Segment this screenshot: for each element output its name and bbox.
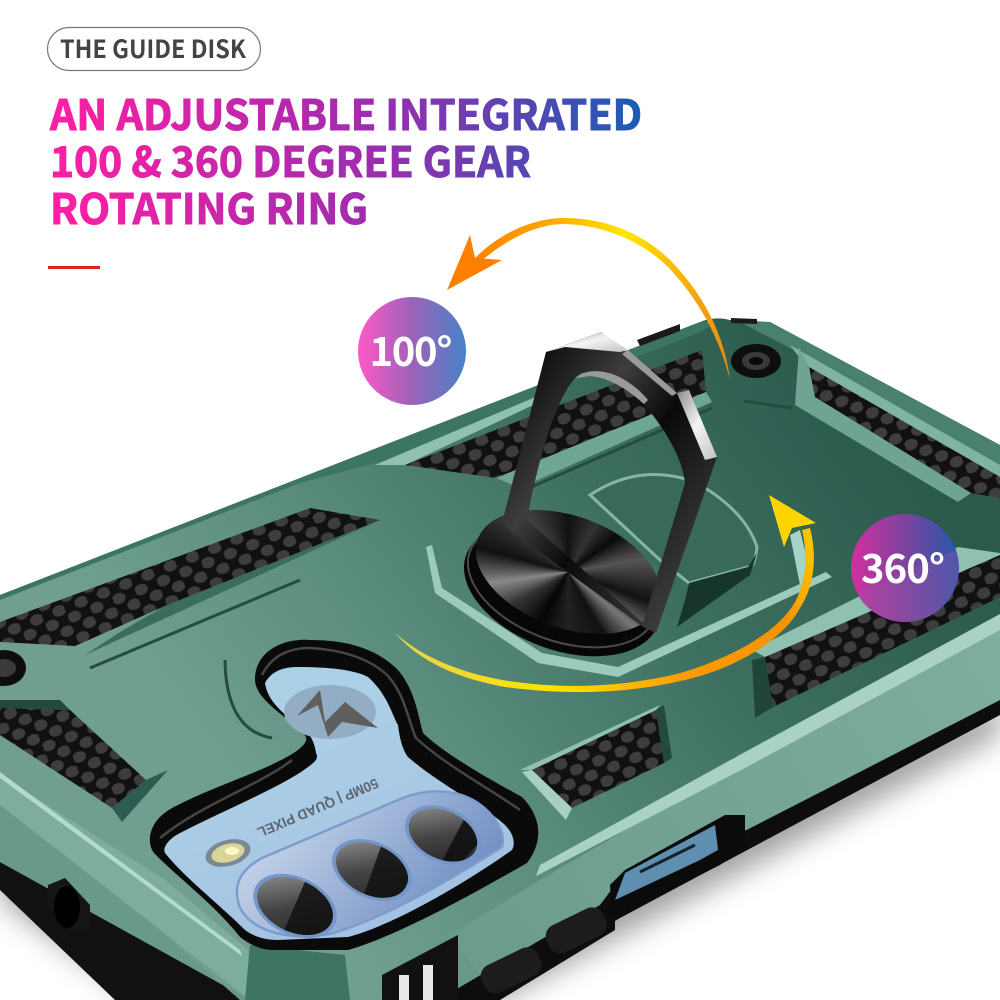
grip: lower left xyxy=(0,708,146,808)
raised light bevels xyxy=(0,347,1000,822)
ring mount recess xyxy=(426,470,832,677)
metal disc xyxy=(476,510,657,634)
right edge band xyxy=(740,322,1000,470)
grip: right xyxy=(765,555,1000,707)
finger ring xyxy=(464,332,717,656)
flash xyxy=(202,834,254,872)
camera glass xyxy=(164,667,514,940)
red accent line xyxy=(48,266,100,269)
SIM tray xyxy=(610,815,745,918)
camera island xyxy=(237,791,503,936)
lower band of case xyxy=(0,630,1000,1000)
grip: lower middle xyxy=(532,710,664,808)
camera cutout black bezel xyxy=(150,640,538,950)
grip: top right xyxy=(809,367,1000,498)
bevel lines on plate xyxy=(90,401,792,738)
screw: top right xyxy=(731,344,781,378)
arrow: 100 degree rotation xyxy=(447,218,730,380)
badge: 100 degrees xyxy=(358,297,466,405)
arrow: 360 degree rotation xyxy=(395,495,816,692)
bottom corner panel xyxy=(245,945,350,1000)
top side buttons xyxy=(637,318,757,346)
tag: the guide disk: THE GUIDE DISK xyxy=(60,30,247,66)
base ring xyxy=(446,499,678,681)
lens 1 xyxy=(253,874,337,938)
camera text: 50MP | QUAD PIXEL xyxy=(255,775,381,841)
grip: top middle xyxy=(405,350,706,478)
black underside xyxy=(0,660,1000,1000)
lens 2 xyxy=(332,839,412,901)
camera module xyxy=(150,640,538,951)
title: ROTATING RING xyxy=(50,176,368,237)
badge: 100 degrees: 100° xyxy=(370,320,452,378)
top edge highlight xyxy=(0,322,716,600)
badge: 360 degrees: 360° xyxy=(861,537,945,595)
phone case xyxy=(0,318,1000,1000)
motorola logo xyxy=(284,685,378,739)
grip: upper left xyxy=(0,508,380,646)
case body xyxy=(0,318,1000,1000)
bottom connector xyxy=(382,935,458,1000)
side buttons xyxy=(455,885,615,1000)
title: AN ADJUSTABLE INTEGRATED xyxy=(49,82,642,143)
handle silver shoulder xyxy=(546,332,628,352)
badge: 360 degrees xyxy=(851,514,959,622)
audio jack xyxy=(48,878,90,930)
lens 3 xyxy=(405,805,479,864)
screw: left xyxy=(0,650,26,686)
title: 100 & 360 DEGREE GEAR xyxy=(50,129,531,190)
phone shadow xyxy=(0,700,1000,1000)
handle arch xyxy=(502,332,717,633)
title xyxy=(49,82,642,237)
